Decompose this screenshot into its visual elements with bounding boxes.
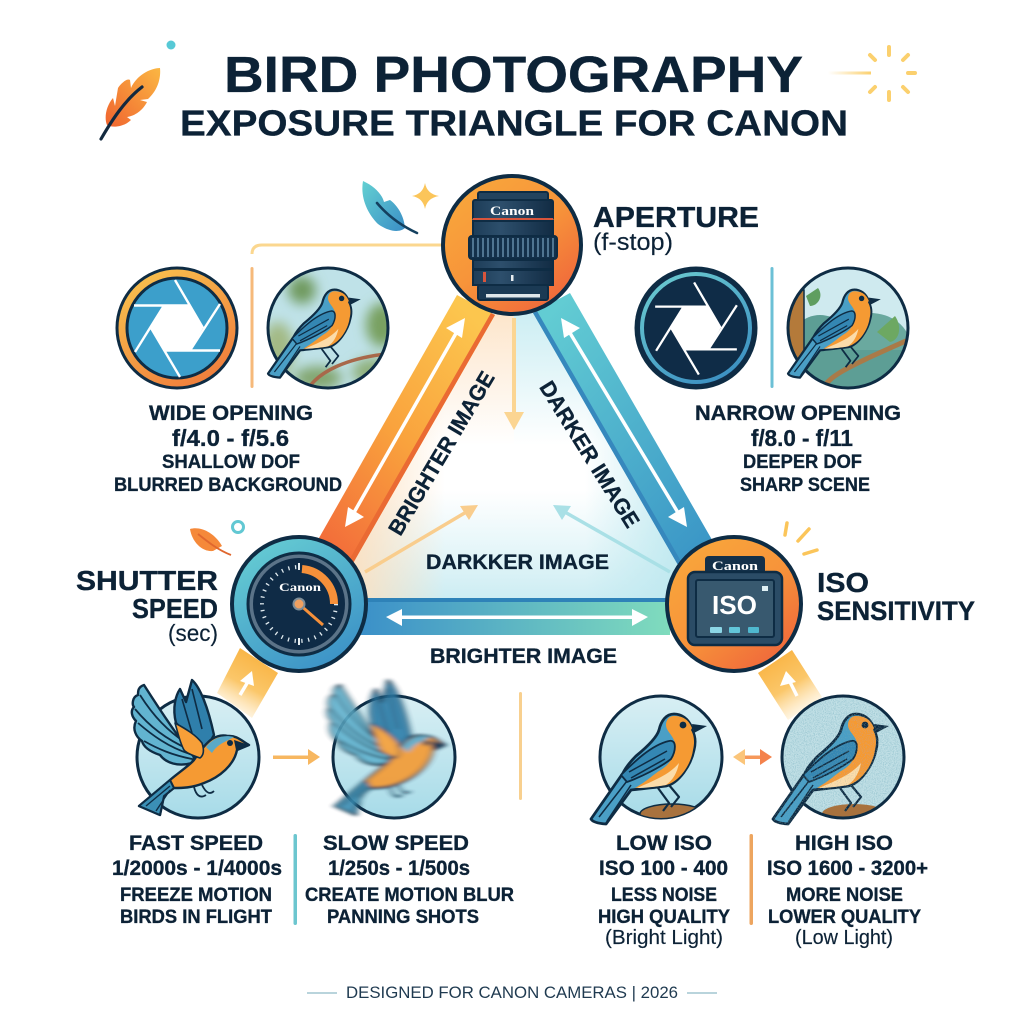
text: narrow opening (695, 402, 901, 496)
divider: low and high (750, 834, 753, 925)
text: fast speed: BIRDS IN FLIGHT (120, 906, 272, 928)
text: wide opening (114, 402, 342, 496)
text: low ISO: LOW ISO (616, 832, 712, 855)
text: high ISO: ISO 1600 - 3200+ (767, 857, 928, 880)
text: fast speed (112, 832, 282, 928)
icon: small blue feather (362, 181, 417, 233)
node: shutter speed dial (232, 537, 366, 671)
icon: canon lens: Canon (490, 204, 534, 218)
icon: sun rays (828, 47, 915, 100)
text: wide opening: WIDE OPENING (149, 402, 313, 425)
icon: teal ring (232, 522, 244, 532)
label: shutter speed (76, 565, 218, 646)
label: aperture: (f-stop) (593, 229, 673, 256)
text: high ISO: MORE NOISE (786, 884, 903, 906)
node: ISO camera screen (667, 537, 801, 671)
label: aperture (593, 202, 759, 256)
text: low ISO: ISO 100 - 400 (599, 857, 728, 880)
band: aperture to ISO (533, 293, 715, 565)
band: shutter to ISO (360, 598, 670, 635)
text: slow speed: 1/250s - 1/500s (328, 857, 470, 880)
band: aperture to shutter (315, 295, 495, 565)
text: slow speed: SLOW SPEED (323, 832, 469, 855)
text: low ISO: LESS NOISE (611, 884, 717, 906)
text: slow speed: CREATE MOTION BLUR (305, 884, 514, 906)
text: narrow opening: f/8.0 - f/11 (751, 425, 853, 451)
text: low ISO: (Bright Light) (605, 927, 723, 949)
divider: center vertical (519, 692, 522, 800)
divider: fast and slow (294, 834, 297, 925)
label: ISO sensitivity (817, 567, 975, 626)
divider: wide opening (250, 267, 254, 388)
label: ISO sensitivity: SENSITIVITY (817, 596, 975, 626)
arrow: fast to slow (273, 749, 320, 765)
icon: ISO sparks (785, 523, 817, 554)
icon: teal dot (166, 40, 176, 50)
node: shutter speed dial: Canon (279, 580, 321, 594)
triangle interior (325, 312, 705, 600)
arrow: from shutter inward (365, 505, 478, 572)
icon: camera body: ISO (712, 590, 757, 620)
text: high ISO: (Low Light) (795, 927, 893, 949)
text: low ISO: HIGH QUALITY (598, 906, 730, 928)
text: wide opening: BLURRED BACKGROUND (114, 474, 342, 496)
text: high ISO (767, 832, 928, 949)
text: narrow opening: DEEPER DOF (743, 451, 862, 473)
connector: aperture to wide opening (252, 245, 441, 254)
label: brighter image: BRIGHTER IMAGE (430, 645, 617, 668)
icon: high ISO noisy bird (773, 696, 904, 824)
icon: wide aperture (117, 268, 237, 388)
feeder: shutter to fast bird (217, 648, 278, 718)
text: slow speed (305, 832, 514, 928)
icon: narrow aperture (636, 268, 756, 388)
icon: orange leaf (190, 528, 231, 555)
label: ISO sensitivity: ISO (817, 567, 869, 598)
icon: fast bird (132, 680, 259, 818)
text: narrow opening: SHARP SCENE (740, 474, 870, 496)
divider: narrow opening (770, 267, 774, 388)
icon: star sparkle (412, 183, 439, 209)
icon: bird with blurred background (266, 266, 390, 390)
text: fast speed: FREEZE MOTION (120, 884, 272, 906)
icon: camera body (688, 556, 782, 645)
title: BIRD PHOTOGRAPHY (224, 46, 803, 103)
label: shutter speed: SHUTTER (76, 565, 218, 596)
icon: orange feather (101, 68, 160, 139)
text: slow speed: PANNING SHOTS (327, 906, 479, 928)
arrow: from ISO inward (553, 505, 670, 572)
label: darker image diagonal: DARKER IMAGE (534, 376, 645, 532)
label: brighter image diagonal: BRIGHTER IMAGE (383, 367, 500, 540)
label: shutter speed: SPEED (132, 593, 218, 624)
text: high ISO: LOWER QUALITY (768, 906, 921, 928)
arrow: center downward (504, 318, 524, 430)
node: aperture lens (443, 176, 581, 314)
label: darkker image: DARKKER IMAGE (426, 551, 609, 574)
text: low ISO (598, 832, 730, 949)
text: narrow opening: NARROW OPENING (695, 402, 901, 425)
label: shutter speed: (sec) (168, 620, 218, 646)
text: wide opening: f/4.0 - f/5.6 (172, 425, 289, 451)
arrow: low to high (733, 749, 772, 765)
text: fast speed: 1/2000s - 1/4000s (112, 857, 282, 880)
footer: DESIGNED FOR CANON CAMERAS | 2026 (346, 984, 678, 1002)
icon: slow bird blurred (328, 680, 455, 818)
label: aperture: APERTURE (593, 202, 759, 234)
icon: low ISO bird (591, 696, 722, 824)
text: fast speed: FAST SPEED (129, 832, 263, 855)
title (180, 46, 848, 144)
text: wide opening: SHALLOW DOF (162, 451, 300, 473)
icon: bird with sharp scene (787, 267, 910, 392)
title: EXPOSURE TRIANGLE FOR CANON (180, 102, 848, 144)
text: high ISO: HIGH ISO (795, 832, 893, 855)
icon: camera body: Canon (712, 558, 759, 573)
feeder: ISO to high bird (758, 650, 822, 720)
